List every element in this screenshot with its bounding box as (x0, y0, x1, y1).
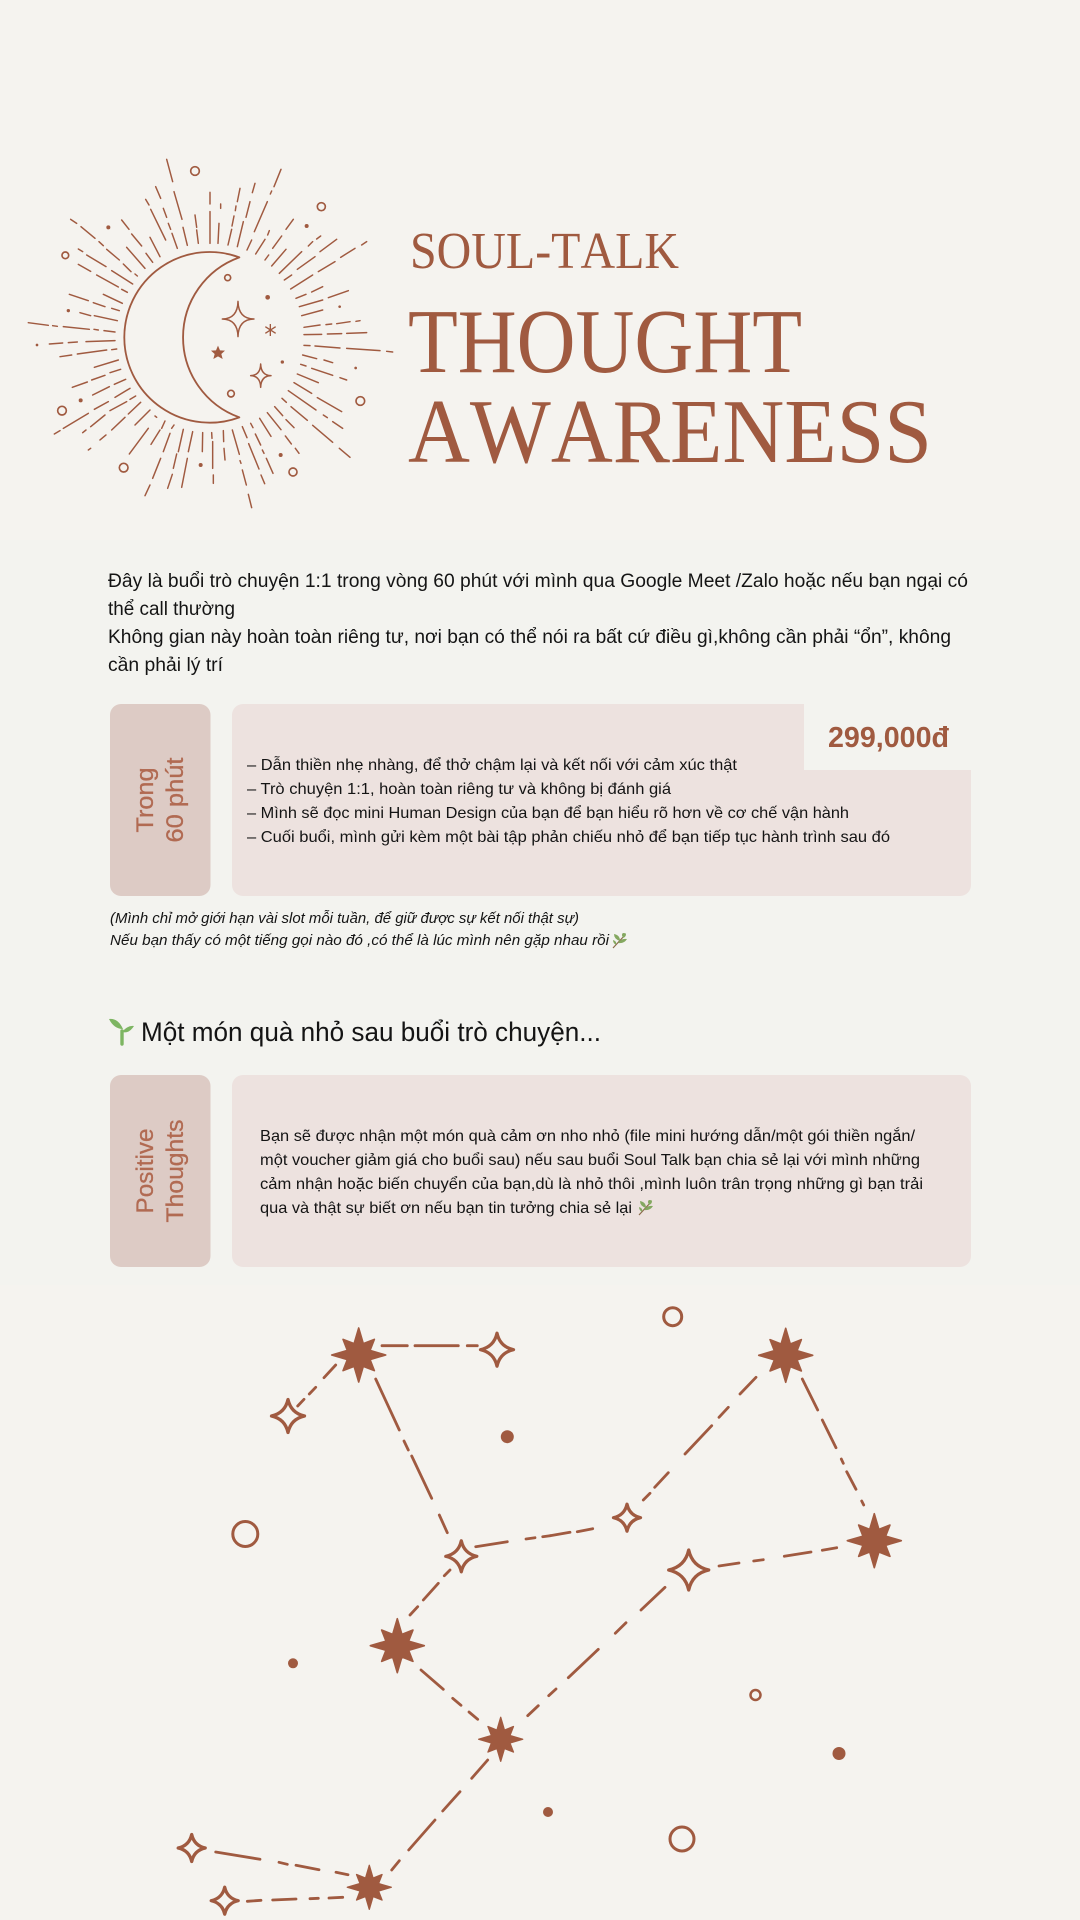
subtitle: SOUL-TALK: SOUL-TALK (410, 223, 679, 280)
intro paragraph (108, 571, 968, 676)
session bullet list: – Dẫn thiền nhẹ nhàng, để thở chậm lại và kết nối với cảm xúc thật (247, 755, 738, 774)
four-point stars beside the moon (222, 301, 271, 387)
price: 299,000đ (828, 722, 949, 754)
intro paragraph: Không gian này hoàn toàn riêng tư, nơi bạn có thể nói ra bất cứ điều gì,không cần phải “ổn”, không (108, 627, 951, 648)
gift description text: cảm nhận hoặc biến chuyển của bạn,dù là nhỏ thôi ,mình luôn trân trọng những gì bạn trải (260, 1175, 923, 1193)
label: Trong 60 phút: Trong (132, 768, 159, 832)
constellation chart (178, 1308, 901, 1914)
note in italics (110, 910, 627, 949)
title (408, 223, 932, 482)
label: Trong 60 phút: 60 phút (162, 757, 189, 842)
crescent moon (124, 252, 239, 423)
outlined circles (233, 1308, 761, 1851)
heading: gift section (109, 1017, 601, 1047)
sunburst rays (28, 159, 393, 508)
gift description text: Bạn sẽ được nhận một món quà cảm ơn nho nhỏ (file mini hướng dẫn/một gói thiền ngắn/ (260, 1126, 916, 1145)
label: Positive Thoughts: Thoughts (162, 1120, 189, 1222)
filled star (211, 346, 225, 359)
label: Trong 60 phút (132, 757, 189, 842)
session bullet list: – Cuối buổi, mình gửi kèm một bài tập phản chiếu nhỏ để bạn tiếp tục hành trình sau đó (247, 828, 890, 846)
heading text: Một món quà nhỏ sau buổi trò chuyện... (141, 1017, 601, 1047)
icon: herb leaf (613, 933, 627, 948)
icon: herb leaf (639, 1200, 653, 1215)
session bullet list: – Trò chuyện 1:1, hoàn toàn riêng tư và không bị đánh giá (247, 781, 671, 798)
icon: crescent moon with sunburst rays (28, 159, 393, 508)
gift description text: một voucher giảm giá cho buổi sau) nếu sau buổi Soul Talk bạn chia sẻ lại với mình những (260, 1151, 920, 1169)
session bullet list (247, 755, 890, 846)
gift description text (260, 1126, 923, 1217)
note in italics: (Mình chỉ mở giới hạn vài slot mỗi tuần, để giữ được sự kết nối thật sự) (110, 910, 579, 927)
panel: positive thoughts label (110, 1075, 210, 1267)
filled dots (288, 1430, 846, 1817)
intro paragraph: cần phải lý trí (108, 655, 224, 676)
asterisk star (265, 324, 276, 336)
title line: THOUGHT: THOUGHT (408, 291, 802, 392)
small outlined circles (58, 167, 365, 476)
icon: seedling (109, 1019, 134, 1044)
label: Positive Thoughts: Positive (132, 1128, 159, 1214)
panel: session details and price (232, 703, 972, 896)
intro paragraph: thể call thường (108, 599, 235, 620)
panel: gift description (232, 1075, 971, 1267)
panel: session duration label (110, 704, 210, 896)
dashed connecting lines (216, 1346, 864, 1901)
label: Positive Thoughts (132, 1120, 189, 1222)
intro paragraph: Đây là buổi trò chuyện 1:1 trong vòng 60 phút với mình qua Google Meet /Zalo hoặc nếu bạn ngại có (108, 571, 968, 592)
title line: AWARENESS: AWARENESS (408, 381, 932, 482)
session bullet list: – Mình sẽ đọc mini Human Design của bạn để bạn hiểu rõ hơn về cơ chế vận hành (247, 804, 849, 822)
small dots (36, 224, 357, 467)
filled eight-point stars (332, 1328, 901, 1909)
outlined four-point stars (178, 1333, 709, 1914)
note in italics: Nếu bạn thấy có một tiếng gọi nào đó ,có thể là lúc mình nên gặp nhau rồi (110, 932, 610, 949)
gift description text: qua và thật sự biết ơn nếu bạn tin tưởng chia sẻ lại (260, 1200, 632, 1217)
